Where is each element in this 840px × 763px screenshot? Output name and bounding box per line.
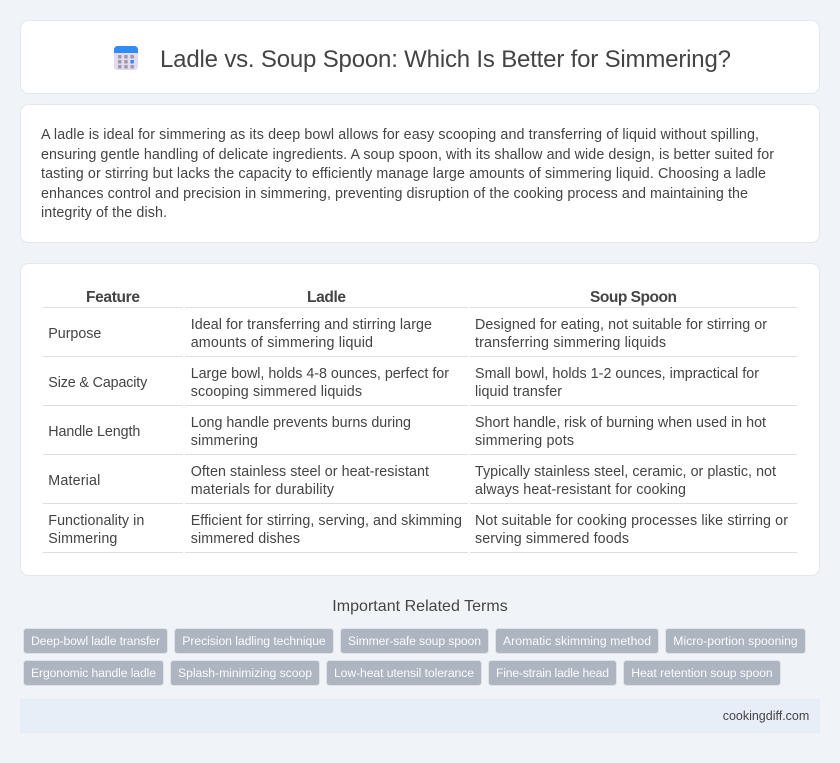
panel: comparison table [20,264,820,576]
tag [24,628,168,654]
tag: Simmer-safe soup spoon [348,634,481,648]
table row: material: materials for durability [191,482,335,498]
table row: material: Material [48,473,100,489]
footer bar [20,699,820,733]
table row: handle length: Handle Length [48,424,140,440]
table row: size and capacity: Large bowl, holds 4-8 ounces, perfect for [191,366,449,382]
text block: summary paragraph: integrity of the dish. [41,205,167,221]
table row: size and capacity [48,366,759,400]
table row: size and capacity: Small bowl, holds 1-2 ounces, impractical for [475,366,759,382]
tag [326,660,482,686]
table header row: Soup Spoon [590,289,677,306]
icon: calendar [114,46,138,70]
tag [170,660,320,686]
table row: purpose: Purpose [48,326,101,342]
table row: functionality in simmering: serving simmered foods [475,531,629,547]
tag [488,660,616,686]
table row: size and capacity: Size & Capacity [48,375,148,391]
table row: material: always heat-resistant for cooking [475,482,686,498]
table row: material: Typically stainless steel, ceramic, or plastic, not [475,464,776,480]
table row: handle length: simmering [191,433,258,449]
tag: Aromatic skimming method [503,634,651,648]
tag: Heat retention soup spoon [631,666,773,680]
tag: Low-heat utensil tolerance [334,666,474,680]
table row: handle length [48,415,766,449]
footer source text: cookingdiff.com [723,709,809,723]
related terms tags [24,628,806,686]
tag [24,660,164,686]
tag [666,628,806,654]
table header row [86,289,677,306]
text block: summary paragraph: A ladle is ideal for simmering as its deep bowl allows for easy scooping and transferring of liquid without spilling, [41,127,759,143]
tag [624,660,780,686]
table row: handle length: Short handle, risk of burning when used in hot [475,415,766,431]
table row: purpose [48,317,767,351]
table header row: Feature [86,289,140,306]
title: Ladle vs. Soup Spoon: Which Is Better for Simmering? [160,46,731,73]
table row: functionality in simmering: Not suitable for cooking processes like stirring or [475,513,788,529]
table row: functionality in simmering: Simmering [48,531,117,547]
tag: Precision ladling technique [182,634,326,648]
table row: functionality in simmering: simmered dishes [191,531,300,547]
table row: size and capacity: scooping simmered liquids [191,384,362,400]
table row: functionality in simmering: Functionality in [48,513,144,529]
tag: Deep-bowl ladle transfer [31,634,160,648]
table row: handle length: Long handle prevents burns during [191,415,411,431]
table row: purpose: Designed for eating, not suitable for stirring or [475,317,767,333]
text block: summary paragraph [41,127,774,221]
table row: material: Often stainless steel or heat-resistant [191,464,429,480]
table row: size and capacity: liquid transfer [475,384,562,400]
tag: Micro-portion spooning [673,634,798,648]
table row: purpose: transferring simmering liquids [475,335,666,351]
table row: functionality in simmering [48,513,788,547]
tag [496,628,658,654]
text block: summary paragraph: ensuring gentle handling of delicate ingredients. A soup spoon, with its shallow and wide design, is better suited for [41,147,774,163]
table row: material [48,464,776,498]
tag: Splash-minimizing scoop [178,666,312,680]
heading: important related terms: Important Related Terms [332,598,508,615]
tag: Ergonomic handle ladle [31,666,156,680]
text block: summary paragraph: tasting or stirring but lacks the capacity to efficiently manage large amounts of simmering liquid. Choosing a ladle [41,166,766,182]
panel: header [20,20,820,94]
text block: summary paragraph: enhances control and precision in simmering, preventing disruption of the cooking process and maintaining the [41,186,748,202]
table row: functionality in simmering: Efficient for stirring, serving, and skimming [191,513,462,529]
table row: purpose: Ideal for transferring and stirring large [191,317,432,333]
tag [340,628,488,654]
tag [174,628,334,654]
table row: handle length: simmering pots [475,433,574,449]
tag: Fine-strain ladle head [496,666,609,680]
table header row: Ladle [307,289,346,306]
table row: purpose: amounts of simmering liquid [191,335,373,351]
panel: summary text [20,104,820,242]
